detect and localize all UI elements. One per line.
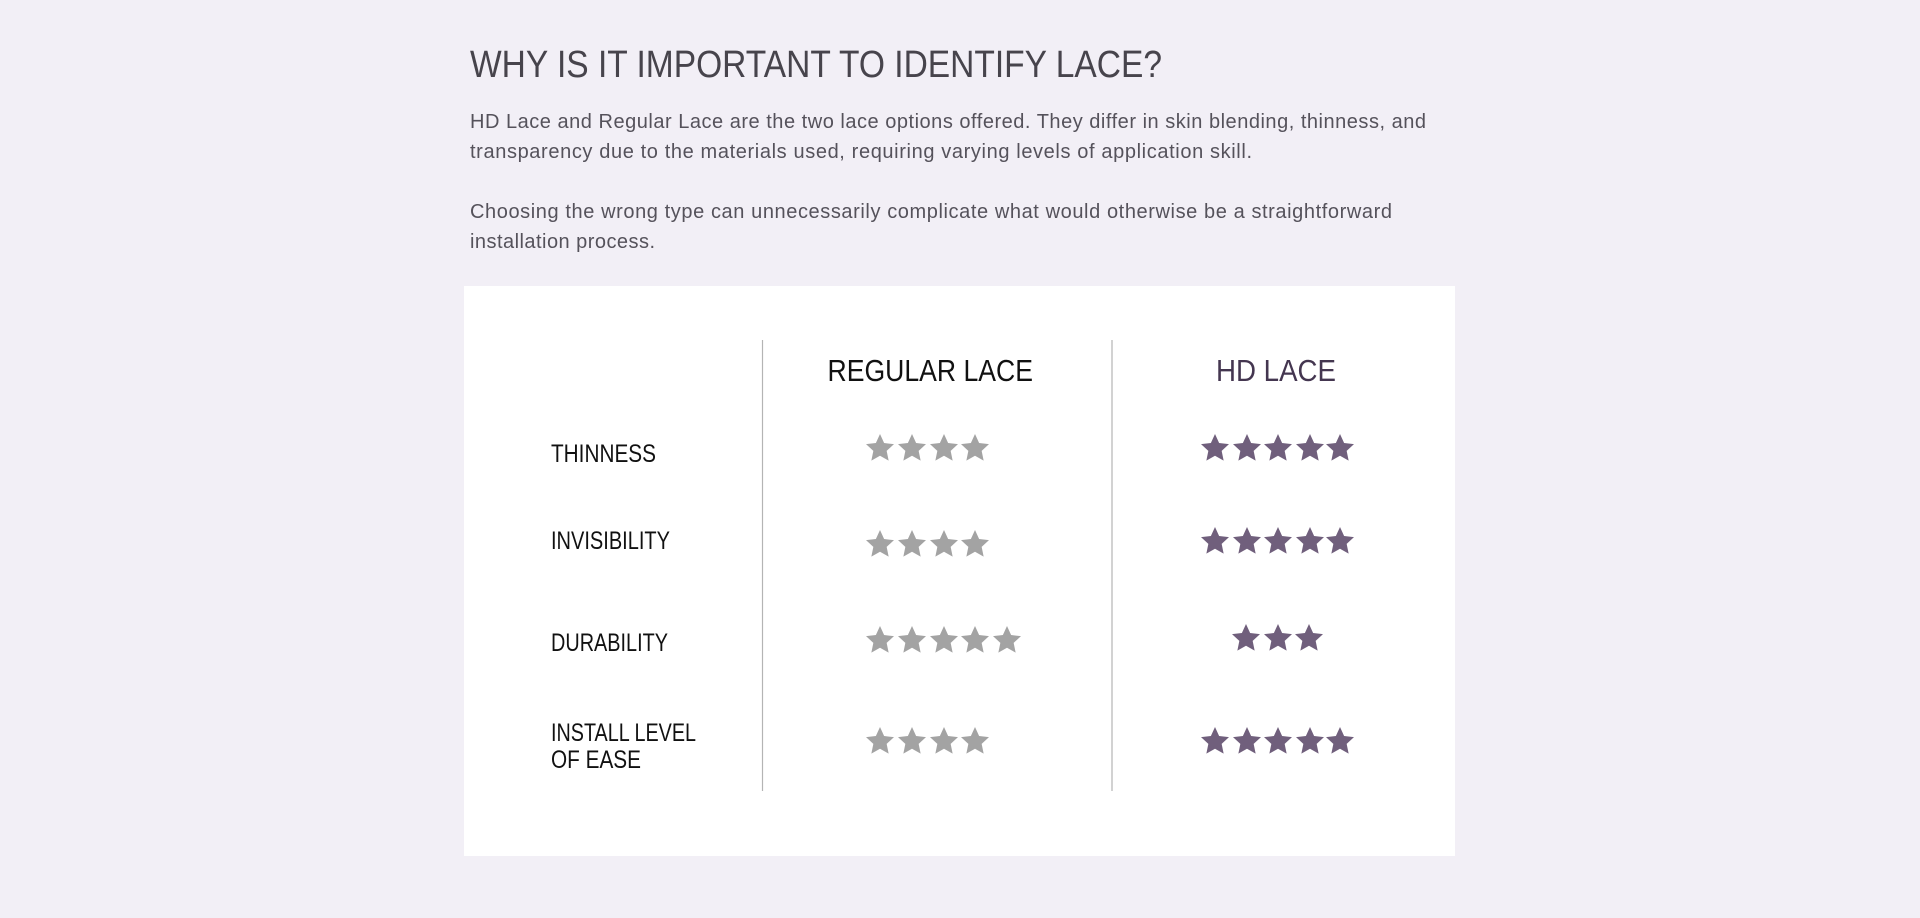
intro text block: transparency due to the materials used, requiring varying levels of application skill. [470,141,1252,163]
row labels [551,440,696,774]
intro text block: HD Lace and Regular Lace are the two lace options offered. They differ in skin blending, thinness, and [470,111,1426,133]
hd lace star ratings [1201,434,1354,754]
regular lace star ratings [866,434,1021,754]
row labels: INVISIBILITY [551,527,670,555]
row labels: OF EASE [551,746,641,774]
heading: regular lace: REGULAR LACE [828,353,1033,388]
intro text block [470,111,1426,253]
panel background [464,286,1455,856]
intro text block: Choosing the wrong type can unnecessarily complicate what would otherwise be a straightforward [470,201,1392,223]
column divider lines [762,340,1112,791]
panel: comparison table [464,286,1455,856]
row labels: INSTALL LEVEL [551,719,696,747]
row labels: DURABILITY [551,629,668,657]
row labels: THINNESS [551,440,656,468]
intro text block: installation process. [470,231,655,253]
title: WHY IS IT IMPORTANT TO IDENTIFY LACE? [470,44,1162,86]
heading: hd lace: HD LACE [1216,353,1336,388]
